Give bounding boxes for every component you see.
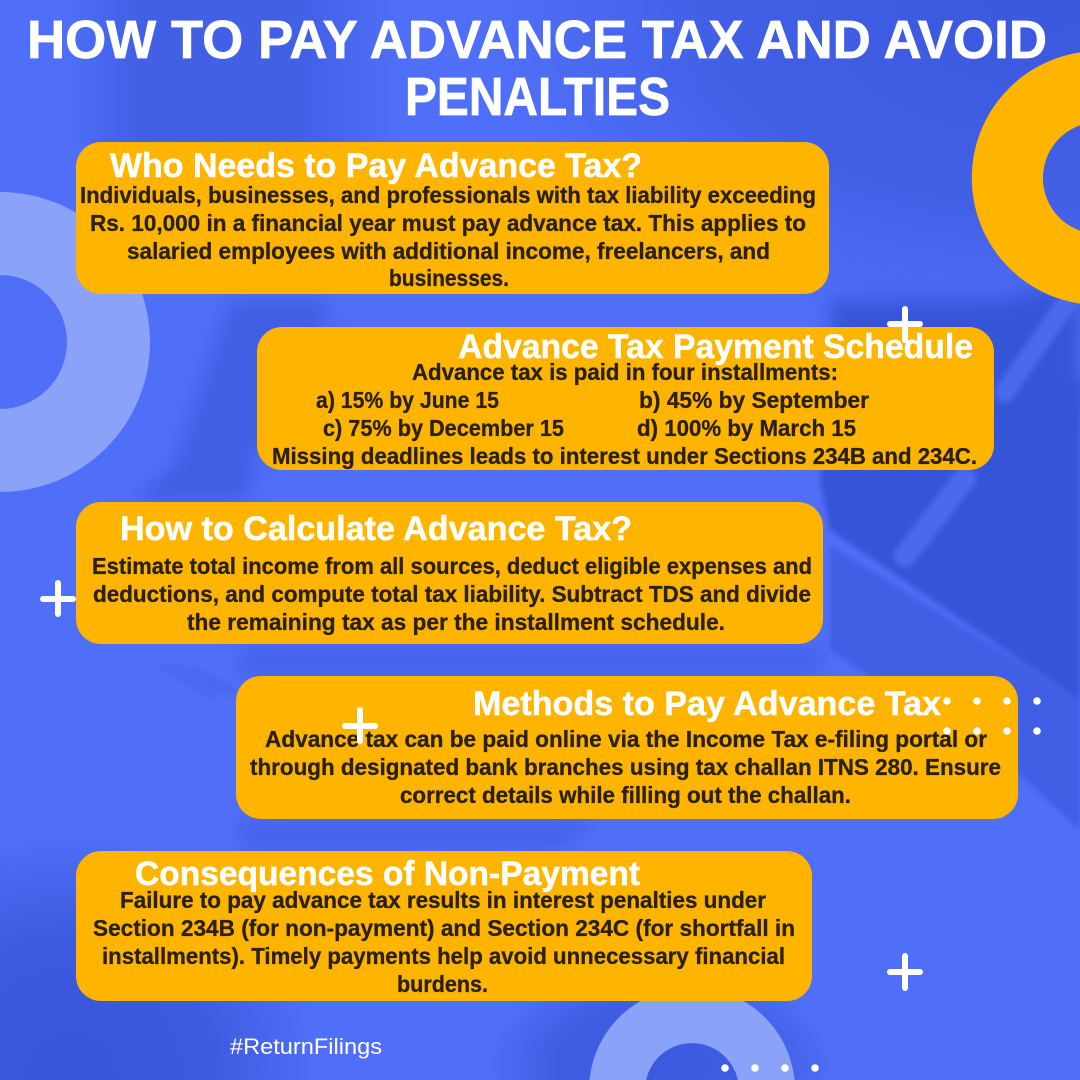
- decorative ring: top right: [972, 52, 1080, 304]
- text: methods to pay: Advance tax can be paid online via the Income Tax e-filing portal or: [265, 726, 987, 752]
- icon: bottom dots: [721, 1064, 819, 1072]
- text: payment schedule: Missing deadlines leads to interest under Sections 234B and 234C.: [272, 443, 977, 469]
- text: how to calculate: deductions, and compute total tax liability. Subtract TDS and divide: [93, 581, 811, 607]
- text: who needs to pay: Rs. 10,000 in a financial year must pay advance tax. This applies to: [90, 210, 806, 236]
- heading: how to calculate: How to Calculate Advance Tax?: [120, 510, 632, 548]
- text: consequences: burdens.: [397, 971, 488, 997]
- text: who needs to pay: [80, 182, 816, 291]
- panel: consequences: [76, 851, 812, 1001]
- title: PENALTIES: [405, 67, 670, 127]
- panel: who needs to pay: [76, 142, 829, 294]
- text: payment schedule: d) 100% by March 15: [637, 415, 856, 441]
- text: who needs to pay: salaried employees with additional income, freelancers, and: [127, 238, 770, 264]
- heading: payment schedule: Advance Tax Payment Schedule: [458, 328, 973, 366]
- heading: who needs to pay: Who Needs to Pay Advance Tax?: [110, 147, 642, 185]
- text: how to calculate: [92, 553, 812, 635]
- decorative ring: bottom: [590, 987, 794, 1080]
- text: methods to pay: correct details while filling out the challan.: [400, 782, 851, 808]
- text: how to calculate: the remaining tax as per the installment schedule.: [187, 609, 725, 635]
- text: who needs to pay: businesses.: [389, 265, 509, 291]
- text: consequences: Failure to pay advance tax results in interest penalties under: [120, 887, 766, 913]
- decorative ring: left: [0, 192, 150, 492]
- text: how to calculate: Estimate total income from all sources, deduct eligible expenses and: [92, 553, 812, 579]
- heading: consequences: Consequences of Non-Payment: [135, 855, 640, 893]
- panel: how to calculate: [76, 502, 823, 644]
- text: payment schedule: Advance tax is paid in four installments:: [412, 359, 838, 385]
- text: payment schedule: a) 15% by June 15: [316, 387, 499, 413]
- text: who needs to pay: Individuals, businesses, and professionals with tax liability exceeding: [80, 182, 816, 208]
- text: methods to pay: [250, 726, 1001, 808]
- panel: payment schedule: [257, 327, 994, 470]
- text: payment schedule: c) 75% by December 15: [323, 415, 564, 441]
- text: consequences: [93, 887, 795, 997]
- title: HOW TO PAY ADVANCE TAX AND AVOID: [27, 10, 1047, 70]
- icon: dot grid: [943, 697, 1041, 735]
- heading: methods to pay: Methods to Pay Advance Tax: [473, 685, 941, 723]
- icon: plus signs: [43, 309, 920, 988]
- text: methods to pay: through designated bank branches using tax challan ITNS 280. Ensure: [250, 754, 1001, 780]
- text: payment schedule: b) 45% by September: [639, 387, 869, 413]
- text: payment schedule: [272, 359, 977, 469]
- text: consequences: installments). Timely payments help avoid unnecessary financial: [102, 943, 785, 969]
- title: [27, 10, 1047, 127]
- hashtag: #ReturnFilings: [230, 1034, 382, 1059]
- text: consequences: Section 234B (for non-payment) and Section 234C (for shortfall in: [93, 915, 795, 941]
- panel: methods to pay: [236, 676, 1018, 819]
